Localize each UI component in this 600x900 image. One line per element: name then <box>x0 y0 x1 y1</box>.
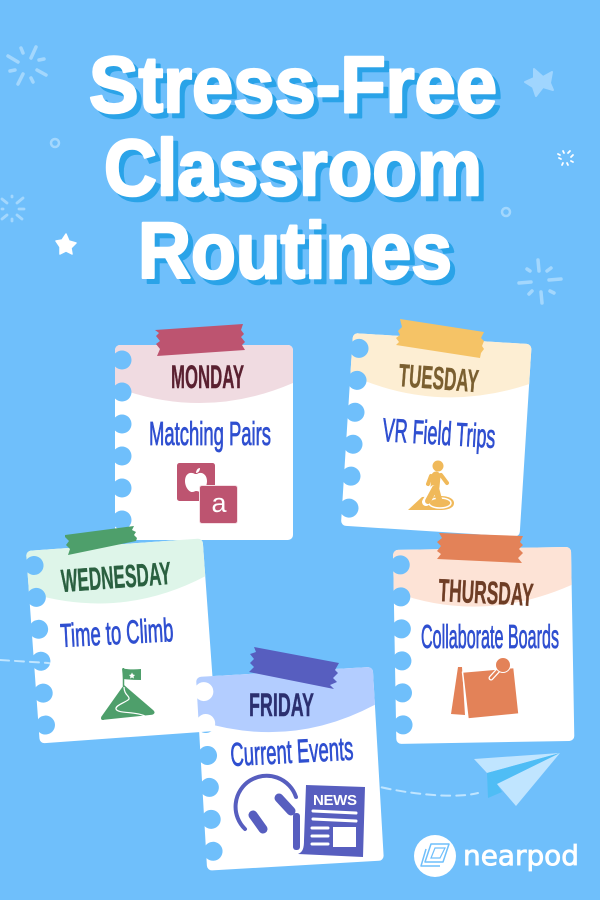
panel: Thursday <box>393 533 574 744</box>
day label: FRIDAY <box>249 687 314 723</box>
ring right <box>502 208 510 216</box>
icon: pinned notes <box>451 658 519 719</box>
day label: MONDAY <box>171 359 244 395</box>
title line 3: Routines <box>138 206 452 295</box>
icon: matching cards <box>177 463 238 524</box>
wordmark: nearpod <box>463 839 579 872</box>
title line 1: Stress-Free <box>89 40 497 129</box>
icon: matching cards: a <box>211 488 227 518</box>
paper <box>26 538 216 744</box>
paper <box>393 547 574 744</box>
icon: newspaper: NEWS <box>313 792 357 809</box>
activity name: Current Events <box>229 730 354 773</box>
icon: newspaper <box>293 785 365 857</box>
burst top left <box>8 47 46 84</box>
dashed flight path <box>0 660 478 796</box>
tape <box>437 533 523 563</box>
burst left <box>2 196 24 221</box>
logo: nearpod <box>414 835 579 877</box>
logo mark <box>414 835 456 877</box>
icon: mountain flag <box>102 668 154 719</box>
paper <box>115 345 293 540</box>
tape <box>65 526 137 555</box>
panel: Tuesday <box>341 319 532 537</box>
activity name: Time to Climb <box>59 611 174 654</box>
icon: headphones <box>236 776 296 829</box>
burst right <box>519 260 561 303</box>
day label: TUESDAY <box>397 357 480 399</box>
icon: paper plane <box>474 753 560 806</box>
tape <box>155 324 245 356</box>
tape <box>396 319 484 358</box>
panel: Friday <box>196 647 384 871</box>
activity name: VR Field Trips <box>382 411 497 455</box>
tape <box>249 647 339 689</box>
paper <box>196 667 384 871</box>
day label: WEDNESDAY <box>60 555 172 599</box>
activity name: Matching Pairs <box>149 415 271 452</box>
title line 2: Classroom <box>104 123 482 212</box>
ring left <box>51 139 59 147</box>
title <box>89 40 497 295</box>
panel: Monday <box>115 324 293 540</box>
paper <box>341 333 532 537</box>
icon: walking figure <box>408 460 454 510</box>
small white burst <box>558 151 573 165</box>
panel: Wednesday <box>26 526 216 744</box>
star light <box>525 69 553 96</box>
decorative background sparkles <box>2 47 561 303</box>
star white <box>56 234 76 254</box>
